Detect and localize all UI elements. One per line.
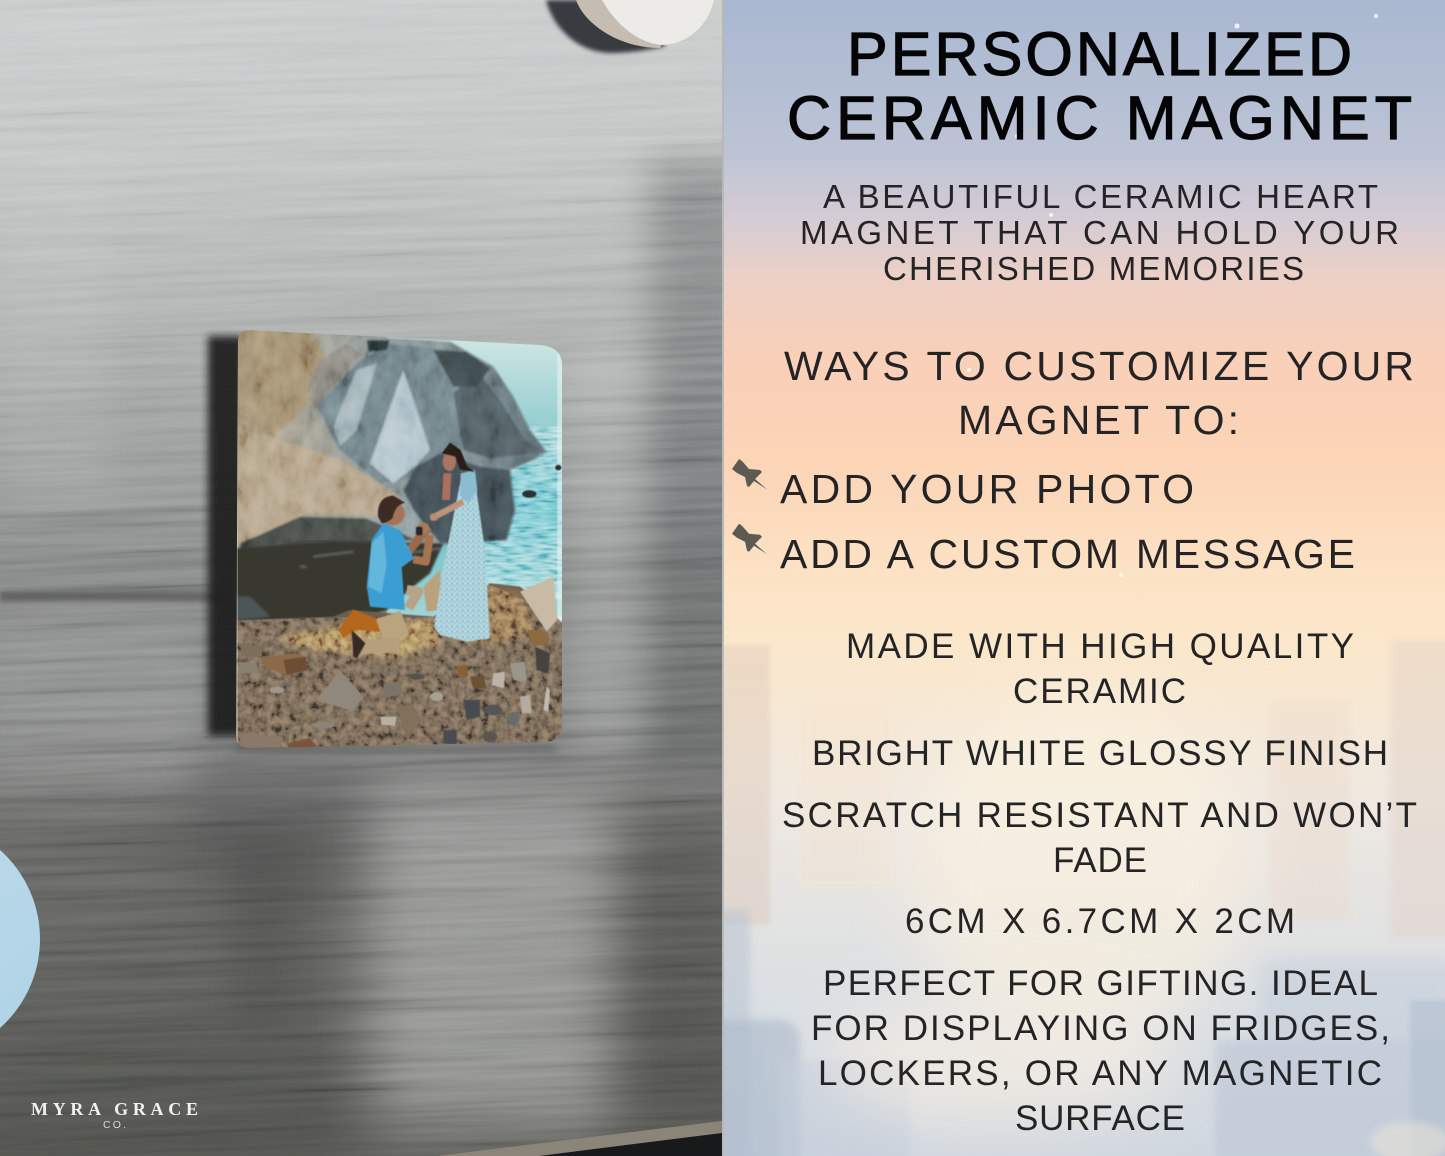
feature: high quality ceramic: MADE WITH HIGH QUALITY [846, 627, 1354, 666]
brand logo [31, 1103, 198, 1128]
panel: product details [690, 0, 1445, 1156]
brand logo: CO. [103, 1119, 126, 1131]
photo: sea [387, 330, 567, 623]
feature: perfect for gifting: FOR DISPLAYING ON FRIDGES, [811, 1009, 1390, 1048]
customization option: add your photo: ADD YOUR PHOTO [780, 466, 1194, 512]
brushed steel background [0, 0, 801, 1156]
subtitle text [800, 178, 1399, 287]
photo: kneeling man [338, 496, 430, 658]
brand logo: MYRA GRACE [31, 1099, 198, 1119]
photo: woman in blue dress [430, 443, 490, 642]
photo: base [334, 334, 387, 613]
feature: scratch resistant: FADE [1053, 841, 1147, 880]
photo: cliff [233, 327, 547, 557]
subtitle text: A BEAUTIFUL CERAMIC HEART [823, 178, 1378, 215]
photo: lagoon [235, 542, 443, 627]
customization heading [784, 343, 1414, 443]
sky and city background [690, 0, 1445, 1156]
feature: dimensions: 6CM X 6.7CM X 2CM [905, 902, 1295, 941]
feature: perfect for gifting: PERFECT FOR GIFTING. IDEAL [823, 964, 1378, 1003]
magnet: white round magnet at top [546, 0, 714, 53]
subtitle text: CHERISHED MEMORIES [883, 250, 1304, 287]
panel: fridge door photo [0, 0, 801, 1156]
feature: scratch resistant: SCRATCH RESISTANT AND WON’T [782, 796, 1417, 835]
title: PERSONALIZED [847, 20, 1352, 88]
customization heading: MAGNET TO: [958, 397, 1239, 443]
icon: push pin [732, 524, 767, 554]
photo: magnet edge highlight [236, 364, 238, 743]
subtitle text: MAGNET THAT CAN HOLD YOUR [800, 214, 1399, 251]
photo: rocky ground [233, 570, 563, 753]
bottom edge of the fridge door [437, 1121, 722, 1156]
feature: perfect for gifting: LOCKERS, OR ANY MAGNETIC [818, 1054, 1382, 1093]
feature: high quality ceramic: CERAMIC [1013, 672, 1186, 711]
magnet: light blue round magnet at left [0, 850, 40, 1028]
feature: scratch resistant [782, 796, 1417, 880]
customization option: add a custom message: ADD A CUSTOM MESSAGE [780, 531, 1355, 577]
customization heading: WAYS TO CUSTOMIZE YOUR [784, 343, 1414, 389]
feature: glossy finish: BRIGHT WHITE GLOSSY FINISH [812, 734, 1388, 773]
icon: push pin [732, 459, 767, 490]
feature: perfect for gifting [811, 964, 1390, 1138]
feature: high quality ceramic [846, 627, 1354, 711]
title [787, 20, 1412, 152]
title: CERAMIC MAGNET [787, 84, 1412, 152]
ceramic magnet with proposal photo [230, 323, 570, 753]
feature: perfect for gifting: SURFACE [1015, 1099, 1185, 1138]
magnet shadow [208, 336, 556, 752]
